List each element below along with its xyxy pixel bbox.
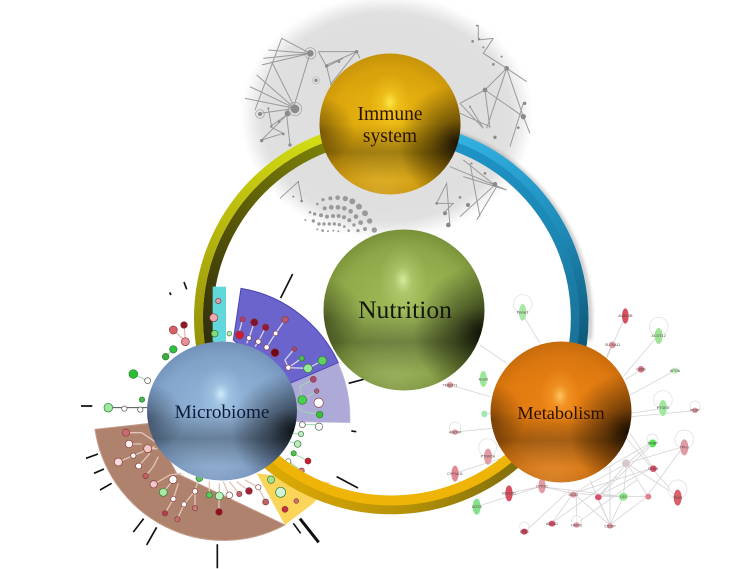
circular ring connecting spheres: [199, 132, 590, 371]
sector: yellow: [257, 473, 330, 525]
sphere: nutrition: [324, 230, 484, 390]
gene labels: TPH1: [680, 445, 689, 449]
ring segment: gold: [265, 448, 526, 509]
immune network graphic: [245, 25, 530, 227]
microbiome circular tree: [81, 274, 365, 568]
branch lines: [118, 433, 266, 519]
gene labels: HSD3B1: [502, 492, 516, 496]
label: nutrition: Nutrition: [358, 295, 452, 324]
gene labels: CYP4A11: [447, 472, 463, 476]
gene labels: LSS: [620, 495, 627, 499]
gene labels: ACOT12: [652, 334, 666, 338]
gene labels: CYP2C: [536, 484, 548, 488]
gene labels: ALDH1B: [618, 314, 633, 318]
sphere: metabolism: [490, 342, 632, 482]
gene labels: CIDEP: [604, 524, 616, 528]
sphere: microbiome: [147, 342, 297, 480]
sector: violet: [233, 288, 338, 383]
gene labels: EHD3: [648, 467, 658, 471]
ring segment: blue: [449, 136, 584, 366]
label: metabolism: Metabolism: [517, 403, 605, 423]
gene labels: TBX3: [673, 496, 682, 500]
label: immune system: Immune: [358, 104, 422, 125]
gene labels: ABCB4: [449, 430, 461, 434]
gene labels: Acot3: [479, 377, 488, 381]
gene labels: PRBP: [648, 441, 658, 445]
tree nodes: [104, 298, 327, 522]
sector: brown: [95, 423, 285, 540]
gene labels: UGT8: [472, 505, 482, 509]
gene labels: TMEM71: [443, 383, 457, 387]
gene labels: APOA: [670, 369, 681, 373]
gene labels: PPIG: [520, 530, 529, 534]
gene labels: CA5B: [636, 367, 646, 371]
gene labels: SCD1: [568, 493, 578, 497]
ring shadow: [450, 132, 590, 340]
sector: cyan bar: [213, 287, 226, 342]
radial dot pattern: [304, 195, 377, 233]
network edges: [450, 317, 695, 532]
gene labels: PTGR1A: [481, 455, 496, 459]
label: immune system: system: [363, 126, 417, 147]
gene labels: [443, 310, 700, 534]
outer tick marks: [81, 274, 365, 568]
gene halo rings: [449, 295, 700, 531]
metabolic network graphic: [443, 295, 700, 535]
gene nodes: [447, 304, 698, 535]
sphere: immune system: [320, 54, 460, 194]
gene labels: HMGS: [571, 523, 583, 527]
gene labels: Ppnar1: [517, 310, 529, 314]
gene labels: ABCB1: [546, 522, 558, 526]
ring segment: yellow-green: [199, 136, 332, 371]
label: microbiome: Microbiome: [175, 402, 269, 423]
background disc behind immune system: [241, 0, 533, 239]
gene labels: PTGES: [657, 406, 670, 410]
gene labels: SLC6A11: [605, 343, 620, 347]
sector: light purple: [290, 363, 350, 423]
gene labels: PEBP: [690, 409, 700, 413]
